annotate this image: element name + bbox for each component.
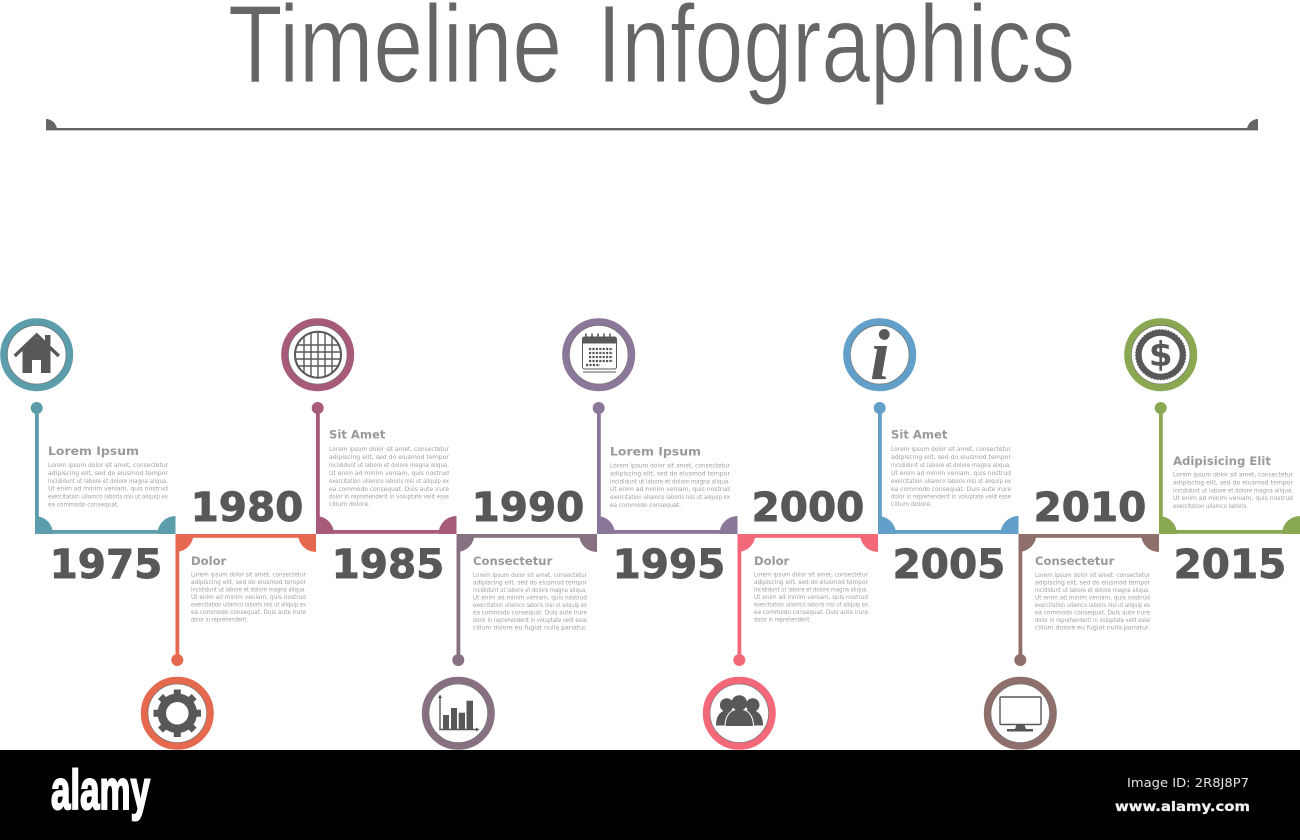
text: Dolor: dolor in reprehenderit.: [191, 618, 248, 624]
text: Dolor: exercitation ullamco laboris nisi ut aliquip ex: [754, 602, 868, 608]
icon: info: i: [870, 315, 890, 395]
text: Adipisicing Elit: adipiscing elit, sed do eiusmod tempor: [1173, 480, 1294, 486]
text: Sit Amet: adipiscing elit, sed do eiusmod tempor: [891, 455, 1012, 461]
text: Sit Amet: exercitation ullamco laboris nisi ut aliquip ex: [329, 479, 450, 485]
text: Sit Amet: [329, 428, 450, 508]
text: Lorem Ipsum: adipiscing elit, sed do eiusmod tempor: [48, 471, 169, 477]
text: Dolor: exercitation ullamco laboris nisi ut aliquip ex: [191, 602, 306, 608]
text: Lorem Ipsum: exercitation ullamco laboris nisi ut aliquip ex: [48, 494, 169, 500]
text: Dolor: Lorem ipsum dolor sit amet, consectetur: [191, 572, 307, 578]
text: Sit Amet: adipiscing elit, sed do eiusmod tempor: [329, 455, 450, 461]
text: Consectetur: [473, 554, 588, 632]
text: Lorem Ipsum: incididunt ut labore et dolore magna aliqua.: [48, 479, 168, 485]
text: Sit Amet: Lorem ipsum dolor sit amet, consectetur: [329, 447, 450, 453]
text: Sit Amet: dolor in reprehenderit in voluptate velit esse: [891, 494, 1011, 500]
text: Dolor: [191, 554, 307, 624]
milestone 2000: [733, 534, 878, 666]
text: Consectetur: dolor in reprehenderit in voluptate velit esse: [473, 618, 587, 624]
text: Sit Amet: Ut enim ad minim veniam, quis nostrud: [891, 471, 1011, 477]
milestone 1980: [171, 534, 316, 666]
text: Dolor: adipiscing elit, sed do eiusmod tempor: [754, 580, 869, 586]
text: Lorem Ipsum: Lorem ipsum dolor sit amet, consectetur: [610, 464, 731, 470]
text: Sit Amet: Sit Amet: [891, 428, 948, 442]
text: Lorem Ipsum: Lorem ipsum dolor sit amet, consectetur: [48, 463, 169, 469]
footer bar: [0, 750, 1300, 840]
milestone 1995: [593, 402, 738, 534]
text: Consectetur: ea commodo consequat. Duis aute irure: [473, 610, 587, 616]
text: Consectetur: Ut enim ad minim veniam, quis nostrud: [1035, 596, 1150, 602]
text: Dolor: Ut enim ad minim veniam, quis nostrud: [191, 595, 306, 601]
text: Consectetur: adipiscing elit, sed do eiusmod tempor: [473, 580, 588, 586]
text: Sit Amet: Ut enim ad minim veniam, quis nostrud: [329, 471, 449, 477]
text: Sit Amet: incididunt ut labore et dolore magna aliqua.: [891, 463, 1011, 469]
milestone 2015: [1155, 402, 1300, 534]
year 1995: 1995: [613, 540, 725, 588]
milestone 2010: [1014, 534, 1159, 666]
icon: monitor: [987, 680, 1053, 746]
text: Consectetur: exercitation ullamco laboris nisi ut aliquip ex: [473, 603, 587, 609]
text: Lorem Ipsum: Lorem Ipsum: [610, 444, 701, 458]
text: Sit Amet: exercitation ullamco laboris nisi ut aliquip ex: [891, 479, 1012, 485]
year 1980: 1980: [191, 483, 303, 531]
footer url: www.alamy.com: [1115, 799, 1250, 815]
text: Sit Amet: ea commodo consequat. Duis aute irure: [329, 487, 449, 493]
text: Sit Amet: cillum dolore.: [891, 502, 932, 508]
year 2015: 2015: [1174, 540, 1286, 588]
text: Consectetur: cillum dolore eu fugiat nulla pariatur.: [1035, 626, 1150, 632]
text: Lorem Ipsum: [610, 444, 731, 509]
year 1985: 1985: [332, 540, 444, 588]
icon: calendar: [566, 322, 632, 388]
text: Dolor: Lorem ipsum dolor sit amet, consectetur: [754, 572, 869, 578]
text: Consectetur: Consectetur: [473, 554, 553, 568]
text: Dolor: ea commodo consequat. Duis aute irure: [191, 610, 306, 616]
text: Sit Amet: ea commodo consequat. Duis aute irure: [891, 487, 1011, 493]
icon: gear: [144, 680, 210, 746]
year 2000: 2000: [752, 483, 864, 531]
text: Consectetur: [1035, 554, 1151, 632]
milestone 1990: [452, 534, 597, 666]
text: Consectetur: cillum dolore eu fugiat nulla pariatur.: [473, 626, 587, 632]
text: Dolor: Dolor: [754, 554, 790, 568]
text: Sit Amet: Sit Amet: [329, 428, 386, 442]
text: Lorem Ipsum: Ut enim ad minim veniam, quis nostrud: [48, 486, 168, 492]
footer logo: alamy: [51, 758, 150, 821]
footer image id: Image ID: 2R8J8P7: [1127, 776, 1249, 790]
icon: info: [847, 315, 913, 395]
icon: dollar coin: $: [1149, 335, 1173, 375]
text: Consectetur: incididunt ut labore et dolore magna aliqua.: [473, 588, 587, 594]
icon: people: [706, 680, 772, 746]
text: Consectetur: dolor in reprehenderit in voluptate velit esse: [1035, 618, 1150, 624]
text: Dolor: incididunt ut labore et dolore magna aliqua.: [754, 588, 868, 594]
title rule: [46, 119, 1258, 130]
title: [228, 0, 1075, 106]
text: Dolor: [754, 554, 869, 624]
milestone 1975: [31, 402, 176, 534]
text: Dolor: dolor in reprehenderit.: [754, 618, 811, 624]
milestone 2005: [874, 402, 1018, 534]
text: Adipisicing Elit: exercitation ullamco laboris.: [1173, 504, 1248, 510]
text: Lorem Ipsum: ea commodo consequat.: [48, 502, 119, 508]
text: Adipisicing Elit: incididunt ut labore et dolore magna aliqua.: [1173, 488, 1293, 494]
text: Dolor: adipiscing elit, sed do eiusmod tempor: [191, 580, 307, 586]
text: Adipisicing Elit: Lorem ipsum dolor sit amet, consectetur: [1173, 472, 1294, 478]
text: Dolor: Dolor: [191, 554, 227, 568]
text: Sit Amet: incididunt ut labore et dolore magna aliqua.: [329, 463, 449, 469]
text: Sit Amet: cillum dolore.: [329, 502, 370, 508]
year 1990: 1990: [472, 483, 584, 531]
year 1975: 1975: [50, 540, 162, 588]
year 2005: 2005: [893, 540, 1005, 588]
text: Lorem Ipsum: Ut enim ad minim veniam, quis nostrud: [610, 487, 730, 493]
text: Adipisicing Elit: [1173, 454, 1294, 510]
text: Lorem Ipsum: exercitation ullamco laboris nisi ut aliquip ex: [610, 495, 731, 501]
icon: home: [4, 322, 70, 388]
icon: globe: [285, 322, 351, 388]
text: Consectetur: Consectetur: [1035, 554, 1115, 568]
text: Dolor: ea commodo consequat. Duis aute irure: [754, 610, 868, 616]
text: Consectetur: ea commodo consequat. Duis aute irure: [1035, 610, 1150, 616]
icon: bar chart: [425, 680, 491, 746]
text: Lorem Ipsum: [48, 444, 169, 508]
text: Lorem Ipsum: ea commodo consequat.: [610, 503, 681, 509]
text: Consectetur: adipiscing elit, sed do eiusmod tempor: [1035, 580, 1151, 586]
milestone 1985: [312, 402, 456, 534]
text: Consectetur: incididunt ut labore et dolore magna aliqua.: [1035, 588, 1150, 594]
text: Adipisicing Elit: Adipisicing Elit: [1173, 454, 1271, 468]
text: Sit Amet: Lorem ipsum dolor sit amet, consectetur: [891, 447, 1012, 453]
text: Lorem Ipsum: adipiscing elit, sed do eiusmod tempor: [610, 472, 731, 478]
text: Adipisicing Elit: Ut enim ad minim veniam, quis nostrud: [1173, 496, 1293, 502]
text: Consectetur: Ut enim ad minim veniam, quis nostrud: [473, 596, 587, 602]
text: Dolor: incididunt ut labore et dolore magna aliqua.: [191, 588, 306, 594]
text: Consectetur: Lorem ipsum dolor sit amet, consectetur: [473, 573, 588, 579]
text: Dolor: Ut enim ad minim veniam, quis nostrud: [754, 595, 868, 601]
text: Sit Amet: [891, 428, 1012, 508]
text: Lorem Ipsum: incididunt ut labore et dolore magna aliqua.: [610, 480, 730, 486]
text: Consectetur: Lorem ipsum dolor sit amet, consectetur: [1035, 573, 1151, 579]
text: Consectetur: exercitation ullamco laboris nisi ut aliquip ex: [1035, 603, 1150, 609]
year 2010: 2010: [1034, 483, 1146, 531]
text: Lorem Ipsum: Lorem Ipsum: [48, 444, 139, 458]
icon: dollar coin: [1128, 322, 1194, 388]
text: Sit Amet: dolor in reprehenderit in voluptate velit esse: [329, 494, 449, 500]
